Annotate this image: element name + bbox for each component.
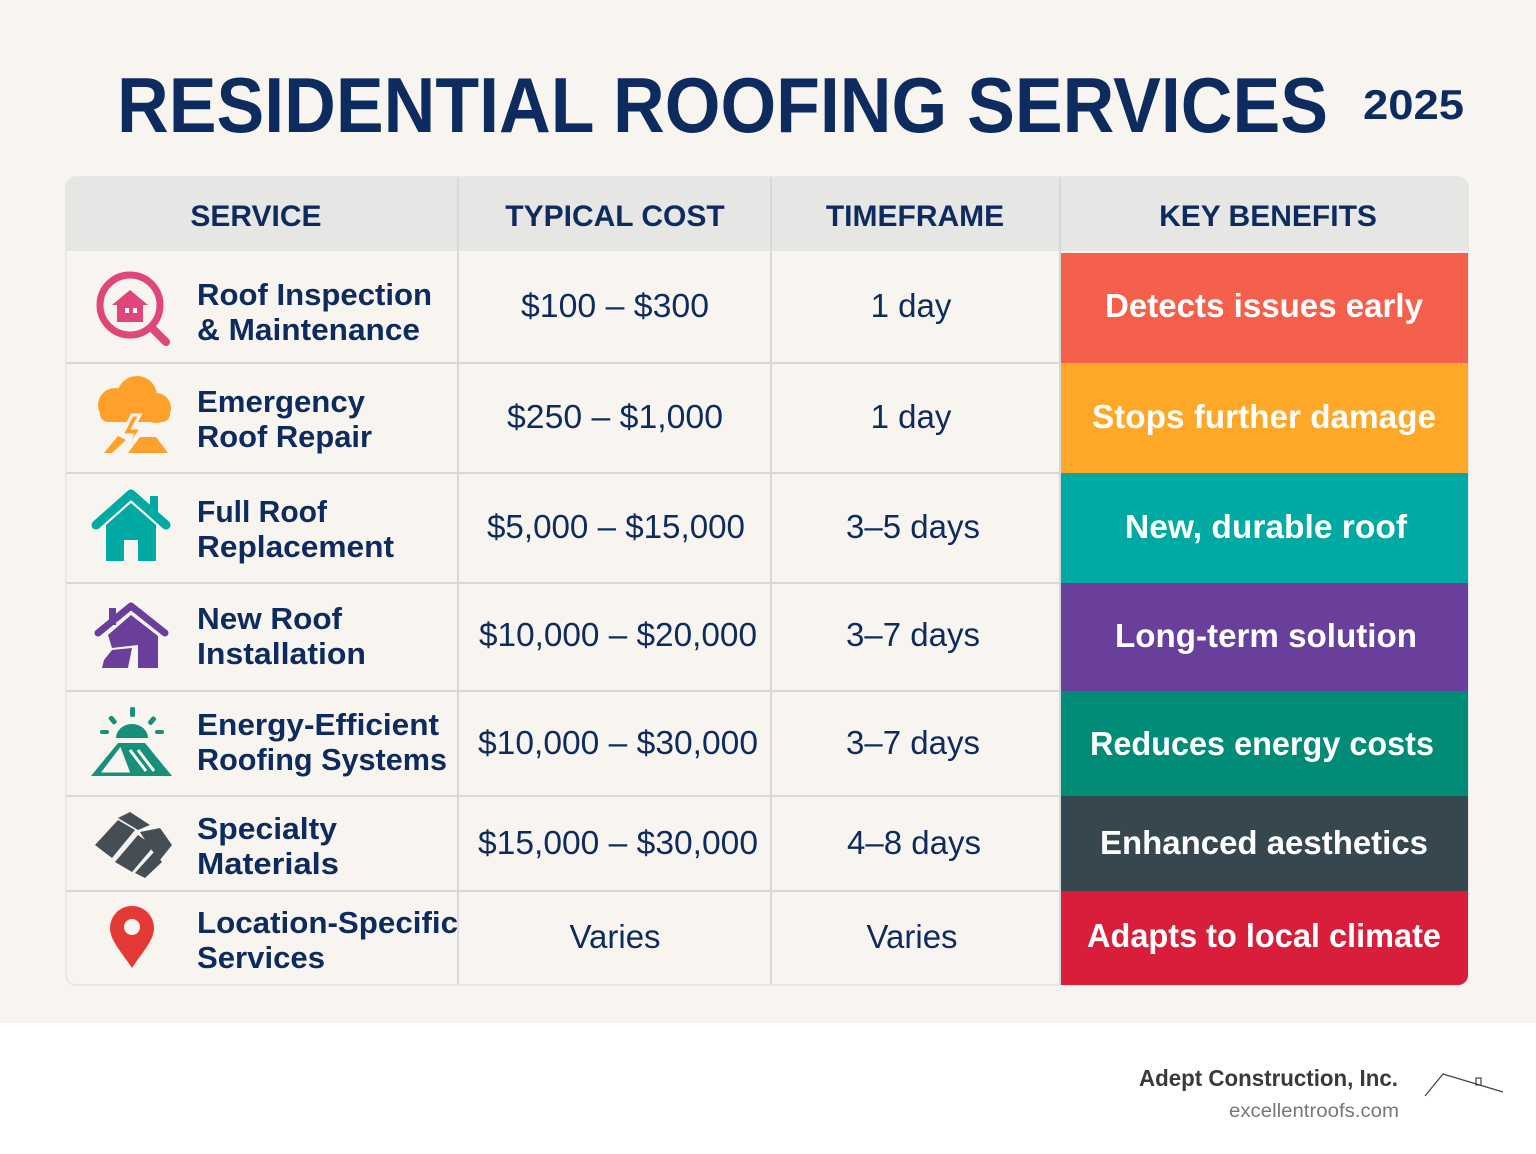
costs [478,287,758,955]
service names: Materials [197,846,339,881]
service names: Energy-Efficient [197,707,439,742]
costs: $100 – $300 [521,287,709,324]
timeframes: 3–7 days [846,616,980,653]
costs: $10,000 – $30,000 [478,724,758,761]
benefit cells: Adapts to local climate [1087,917,1441,954]
service names [197,277,458,975]
icon: roof line logo [1425,1074,1503,1096]
benefit cells: Stops further damage [1092,398,1436,435]
benefit cells: Detects issues early [1105,287,1424,324]
service names: Specialty [197,811,338,846]
costs: Varies [569,918,661,955]
service names: Roof Repair [197,419,372,454]
icon: specialty tiles [95,812,172,878]
footer branding [1139,1065,1503,1122]
icon: location pin [110,906,154,968]
footer branding: excellentroofs.com [1229,1101,1399,1122]
title: 2025 [1363,81,1464,128]
service names: Services [197,940,325,975]
title: RESIDENTIAL ROOFING SERVICES [117,61,1328,149]
timeframes: 1 day [871,398,952,435]
service names: Roofing Systems [197,742,447,777]
benefit cells: Enhanced aesthetics [1100,824,1428,861]
costs: $15,000 – $30,000 [478,824,758,861]
service names: New Roof [197,601,343,636]
timeframes: 3–5 days [846,508,980,545]
costs: $10,000 – $20,000 [479,616,757,653]
timeframes [846,287,981,955]
service names: Full Roof [197,494,328,529]
table header: TIMEFRAME [826,200,1004,233]
icon: solar sun [91,707,172,776]
service names: & Maintenance [197,312,420,347]
icon: inspection magnifier [100,275,166,342]
timeframes: 1 day [871,287,952,324]
footer branding: Adept Construction, Inc. [1139,1065,1398,1091]
benefit cells: Reduces energy costs [1090,725,1434,762]
costs: $250 – $1,000 [507,398,723,435]
timeframes: 4–8 days [847,824,981,861]
service names: Location-Specific [197,905,458,940]
table header: KEY BENEFITS [1159,200,1377,233]
benefit cells: New, durable roof [1125,508,1408,545]
icon: storm cloud [98,376,171,453]
table header: SERVICE [190,200,322,233]
icon: house teal [96,494,166,561]
service names: Installation [197,636,366,671]
table header [66,177,1468,251]
benefit cells [1061,253,1468,985]
benefit cells: Long-term solution [1115,617,1417,654]
service names: Emergency [197,384,366,419]
service names: Roof Inspection [197,277,432,312]
table header: TYPICAL COST [505,200,725,233]
service names: Replacement [197,529,394,564]
timeframes: Varies [866,918,958,955]
timeframes: 3–7 days [846,724,980,761]
icon: house purple [98,606,165,668]
costs: $5,000 – $15,000 [487,508,745,545]
table [66,177,1468,985]
